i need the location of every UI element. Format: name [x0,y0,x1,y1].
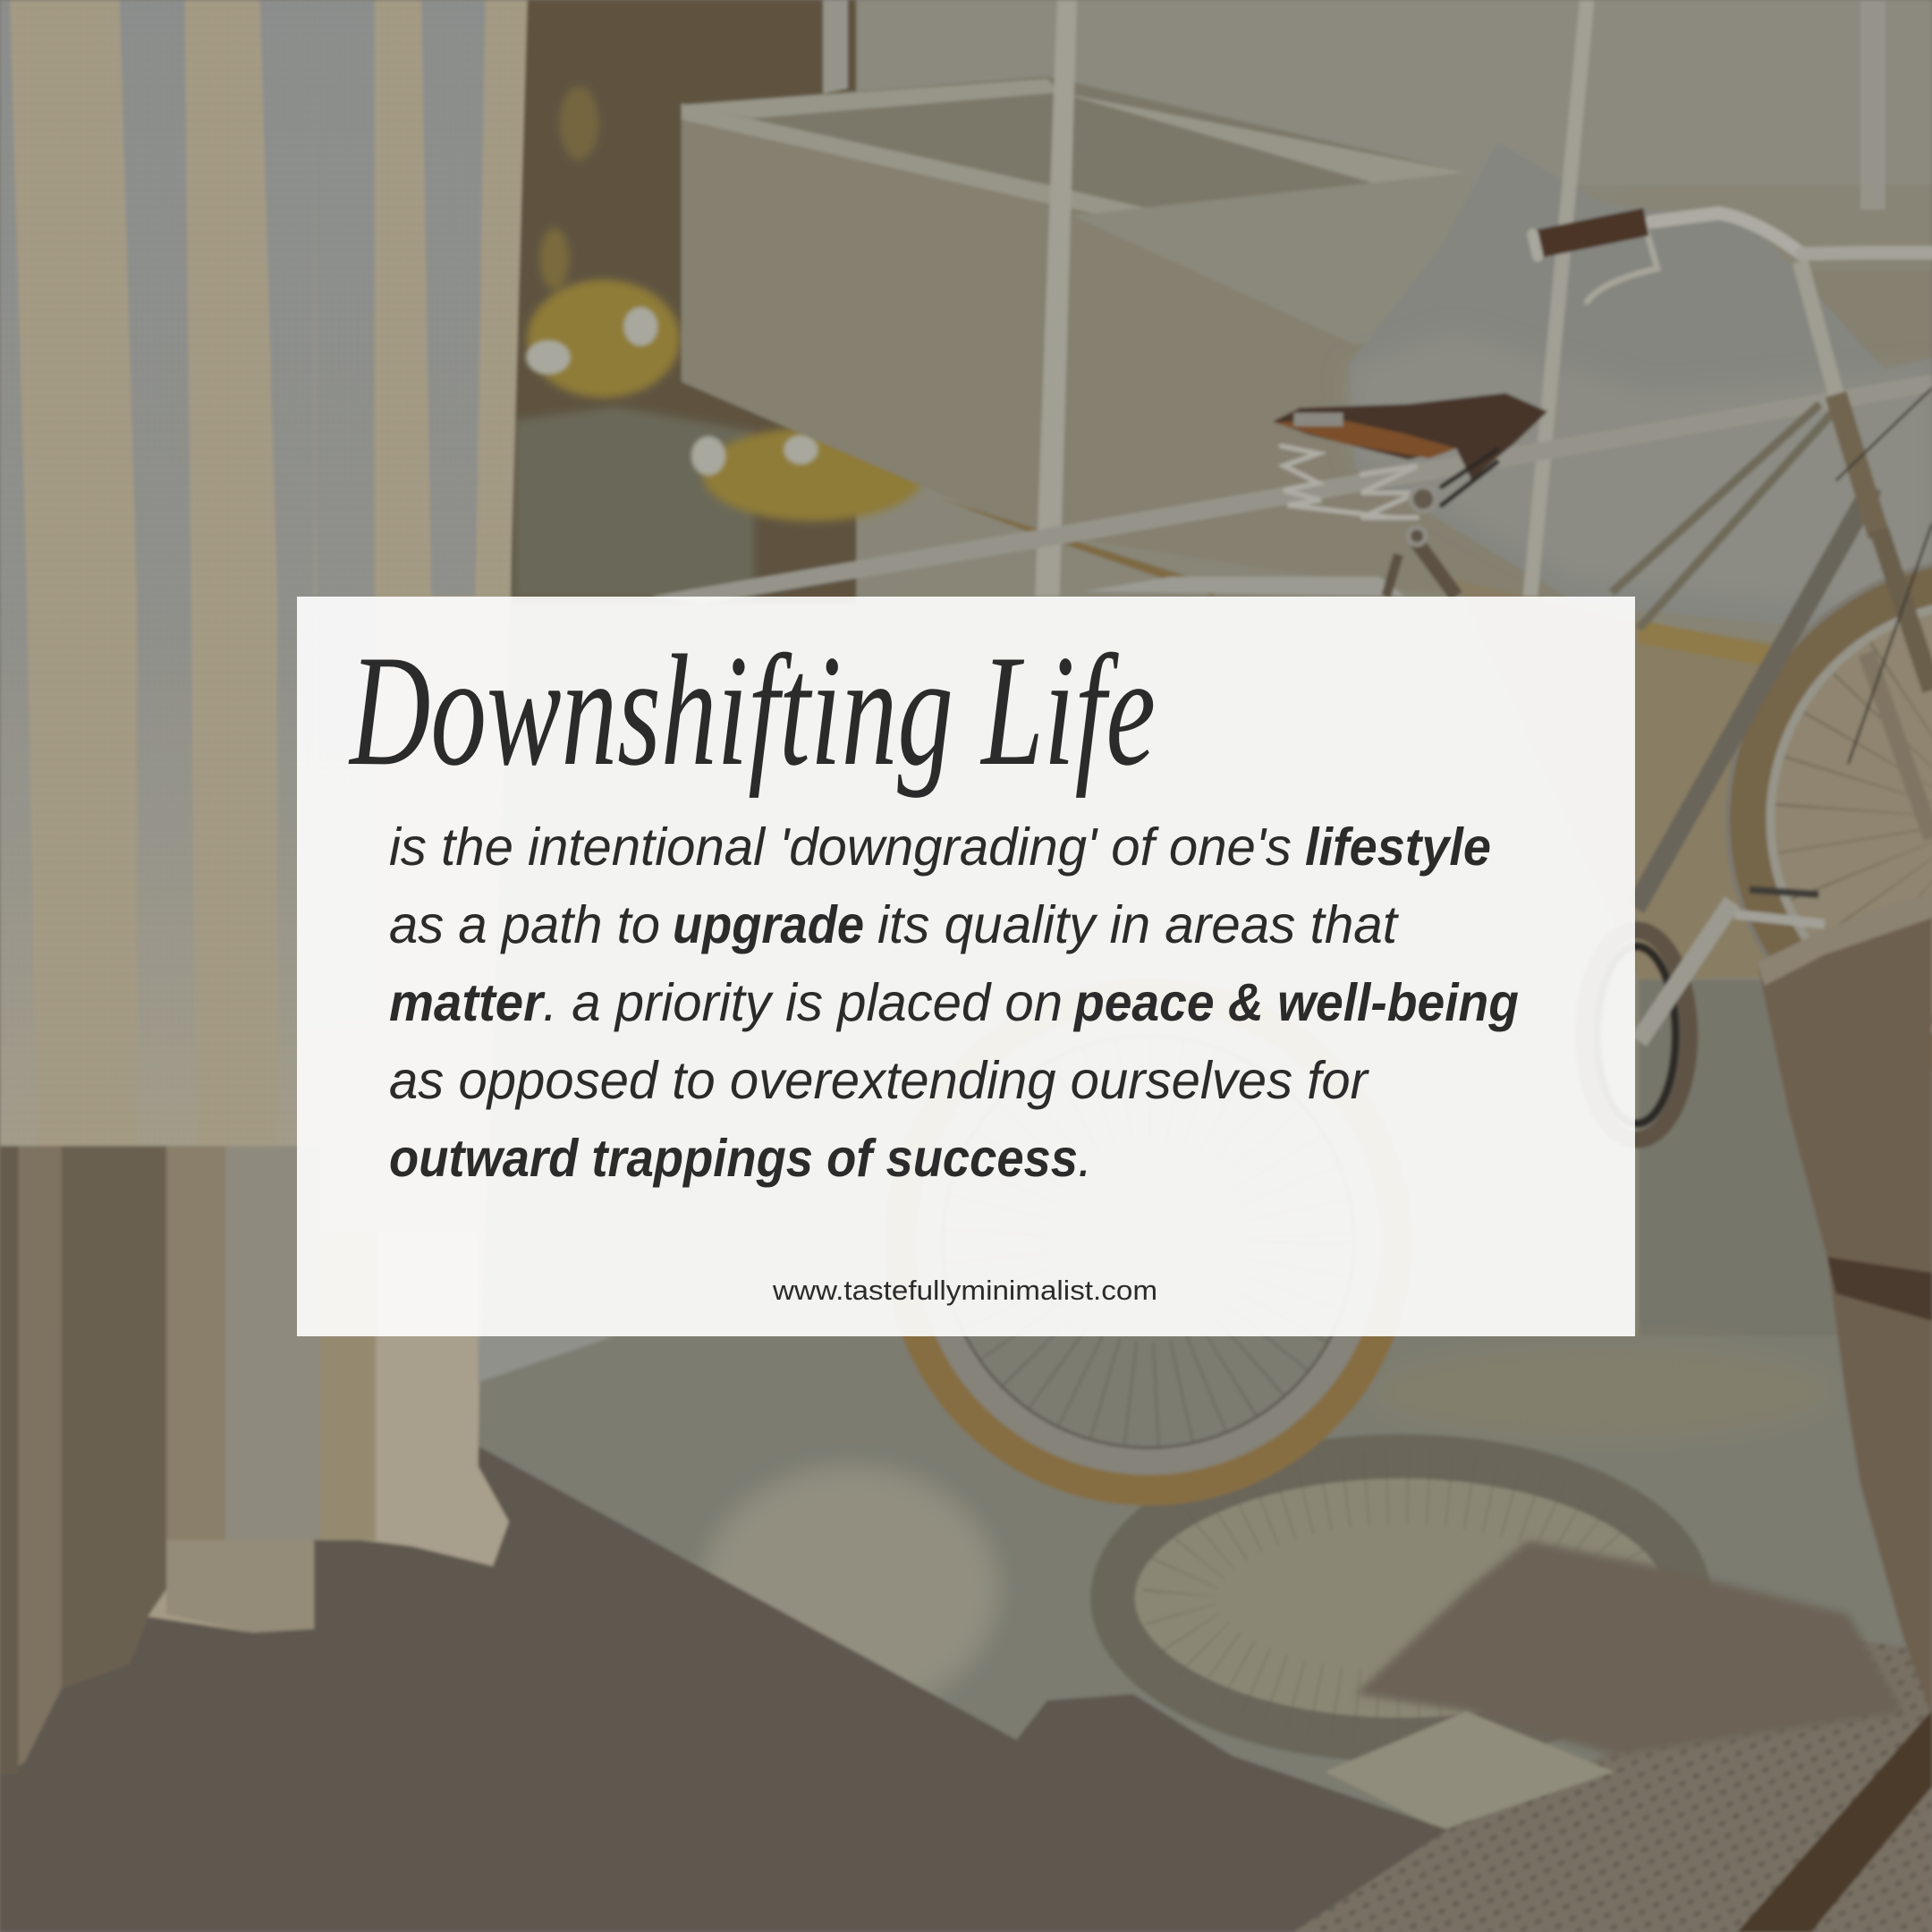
floor: stone below the card [474,1335,1932,1932]
frame tubes [1386,261,1932,908]
floor: dark shadow lower left [0,1444,1448,1932]
curtain gaps [0,0,486,1335]
title: Downshifting Life [349,622,1156,799]
website footer: www.tastefullyminimalist.com [772,1275,1157,1306]
definition text: lifestyle [1305,818,1491,877]
chainring, crank and pedal [1583,890,1825,1140]
definition text: . a priority is placed on [543,973,1063,1032]
back wall top band [851,0,1932,185]
definition text: peace & well-being [1072,973,1519,1032]
armchair [1737,894,1932,1932]
saddle [1273,393,1547,479]
rug lower right [1293,1639,1932,1932]
floor: warm light patches [702,1343,1836,1713]
definition text: . [1078,1129,1092,1188]
saddle springs and post [1282,446,1497,545]
panel: definition card [297,597,1635,1336]
wheel shadow on the floor [1113,1456,1690,1740]
marble box [682,76,1932,616]
definition text: its quality in areas that [877,895,1400,954]
sunlit rug patch [1325,1711,1614,1830]
definition text [389,818,1519,1188]
handlebar [1533,213,1932,301]
definition text: upgrade [673,895,864,954]
box soil edge [937,498,1220,597]
rear wheel [901,995,1396,1489]
bicycle [901,213,1932,1489]
window mullions and rail [650,0,1932,604]
definition text: as opposed to overextending ourselves for [389,1051,1369,1110]
definition text: matter [389,973,546,1032]
definition text: outward trappings of success [389,1129,1078,1188]
floor: grey stone upper right [1639,979,1932,1448]
definition text: as a path to [389,895,660,954]
definition text: is the intentional 'downgrading' of one's [389,818,1292,877]
shrubs seen through the window [512,0,924,604]
cushion below the rail [1084,577,1404,597]
curtain [0,0,530,1775]
dark mass across the rug [1355,1540,1903,1756]
pillow [1349,141,1932,640]
curtain lower folds [0,1146,509,1775]
front wheel [1727,559,1932,1080]
tan backdrop behind bike [1454,579,1932,979]
window sill wedge [478,1335,616,1383]
